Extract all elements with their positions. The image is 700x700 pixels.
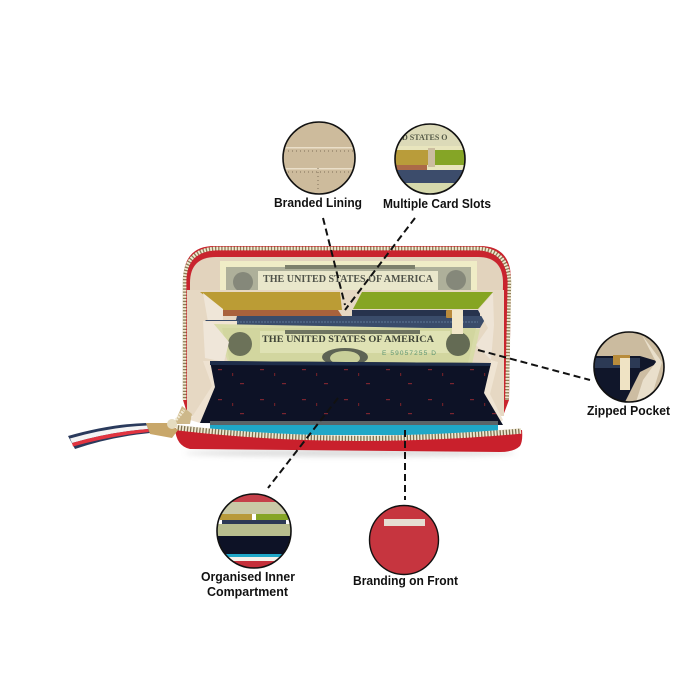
icon: red front circle bbox=[370, 506, 438, 574]
puller tab bbox=[68, 419, 178, 449]
zipper pull bbox=[446, 310, 463, 334]
dashed leader: zipped pocket bbox=[478, 350, 590, 380]
label: Branding on Front bbox=[353, 574, 459, 588]
wallet bbox=[68, 246, 522, 456]
callout: multiple card slots bbox=[383, 124, 491, 211]
top zipper bbox=[184, 248, 510, 400]
label: Zipped Pocket bbox=[587, 404, 671, 418]
navy pocket bbox=[200, 361, 503, 425]
bottom zipper bbox=[176, 428, 521, 438]
callout: branded lining bbox=[274, 122, 362, 210]
left gusset bbox=[203, 293, 223, 322]
label: Compartment bbox=[207, 585, 289, 599]
zipper end hardware bbox=[174, 406, 192, 424]
wallet shadow bbox=[185, 450, 515, 456]
middle dollar bill: THE UNITED STATES OF AMERICA bbox=[262, 335, 434, 345]
middle dollar bill bbox=[213, 324, 480, 366]
infographic: wallet features bbox=[68, 121, 670, 598]
left inner gussets bbox=[203, 321, 229, 362]
green card bbox=[353, 292, 493, 309]
navy card bbox=[352, 310, 480, 318]
label: Branded Lining bbox=[274, 196, 362, 210]
teal card bbox=[210, 425, 498, 435]
icon: compartment circle bbox=[217, 494, 291, 569]
dashed leader: organised compartment bbox=[268, 398, 338, 488]
red front flap bbox=[175, 428, 522, 452]
orange card bbox=[223, 310, 342, 316]
gold card bbox=[200, 292, 342, 310]
dashed leader: branding bbox=[404, 430, 406, 500]
label: Multiple Card Slots bbox=[383, 197, 491, 211]
icon: card slots circle: D STATES O bbox=[402, 133, 448, 142]
card slot panel bbox=[187, 290, 504, 416]
top dollar bill bbox=[220, 261, 477, 292]
callout: branding on front bbox=[353, 506, 459, 588]
right inner gussets bbox=[476, 293, 494, 360]
callout: organised inner compartment bbox=[201, 494, 295, 599]
icon: lining circle bbox=[283, 122, 355, 194]
label bbox=[201, 570, 295, 599]
dashed leader: branded lining bbox=[323, 218, 345, 305]
middle dollar bill: E 59057255 D bbox=[382, 350, 436, 357]
label: Organised Inner bbox=[201, 570, 295, 584]
zipper pocket bbox=[205, 316, 487, 328]
dashed leader: multiple card slots bbox=[345, 218, 415, 310]
top dollar bill: THE UNITED STATES OF AMERICA bbox=[263, 274, 434, 285]
icon: zipped pocket circle bbox=[594, 332, 664, 402]
beige lining bbox=[190, 257, 503, 416]
callout: zipped pocket bbox=[587, 332, 671, 418]
red back cover bbox=[183, 246, 511, 416]
